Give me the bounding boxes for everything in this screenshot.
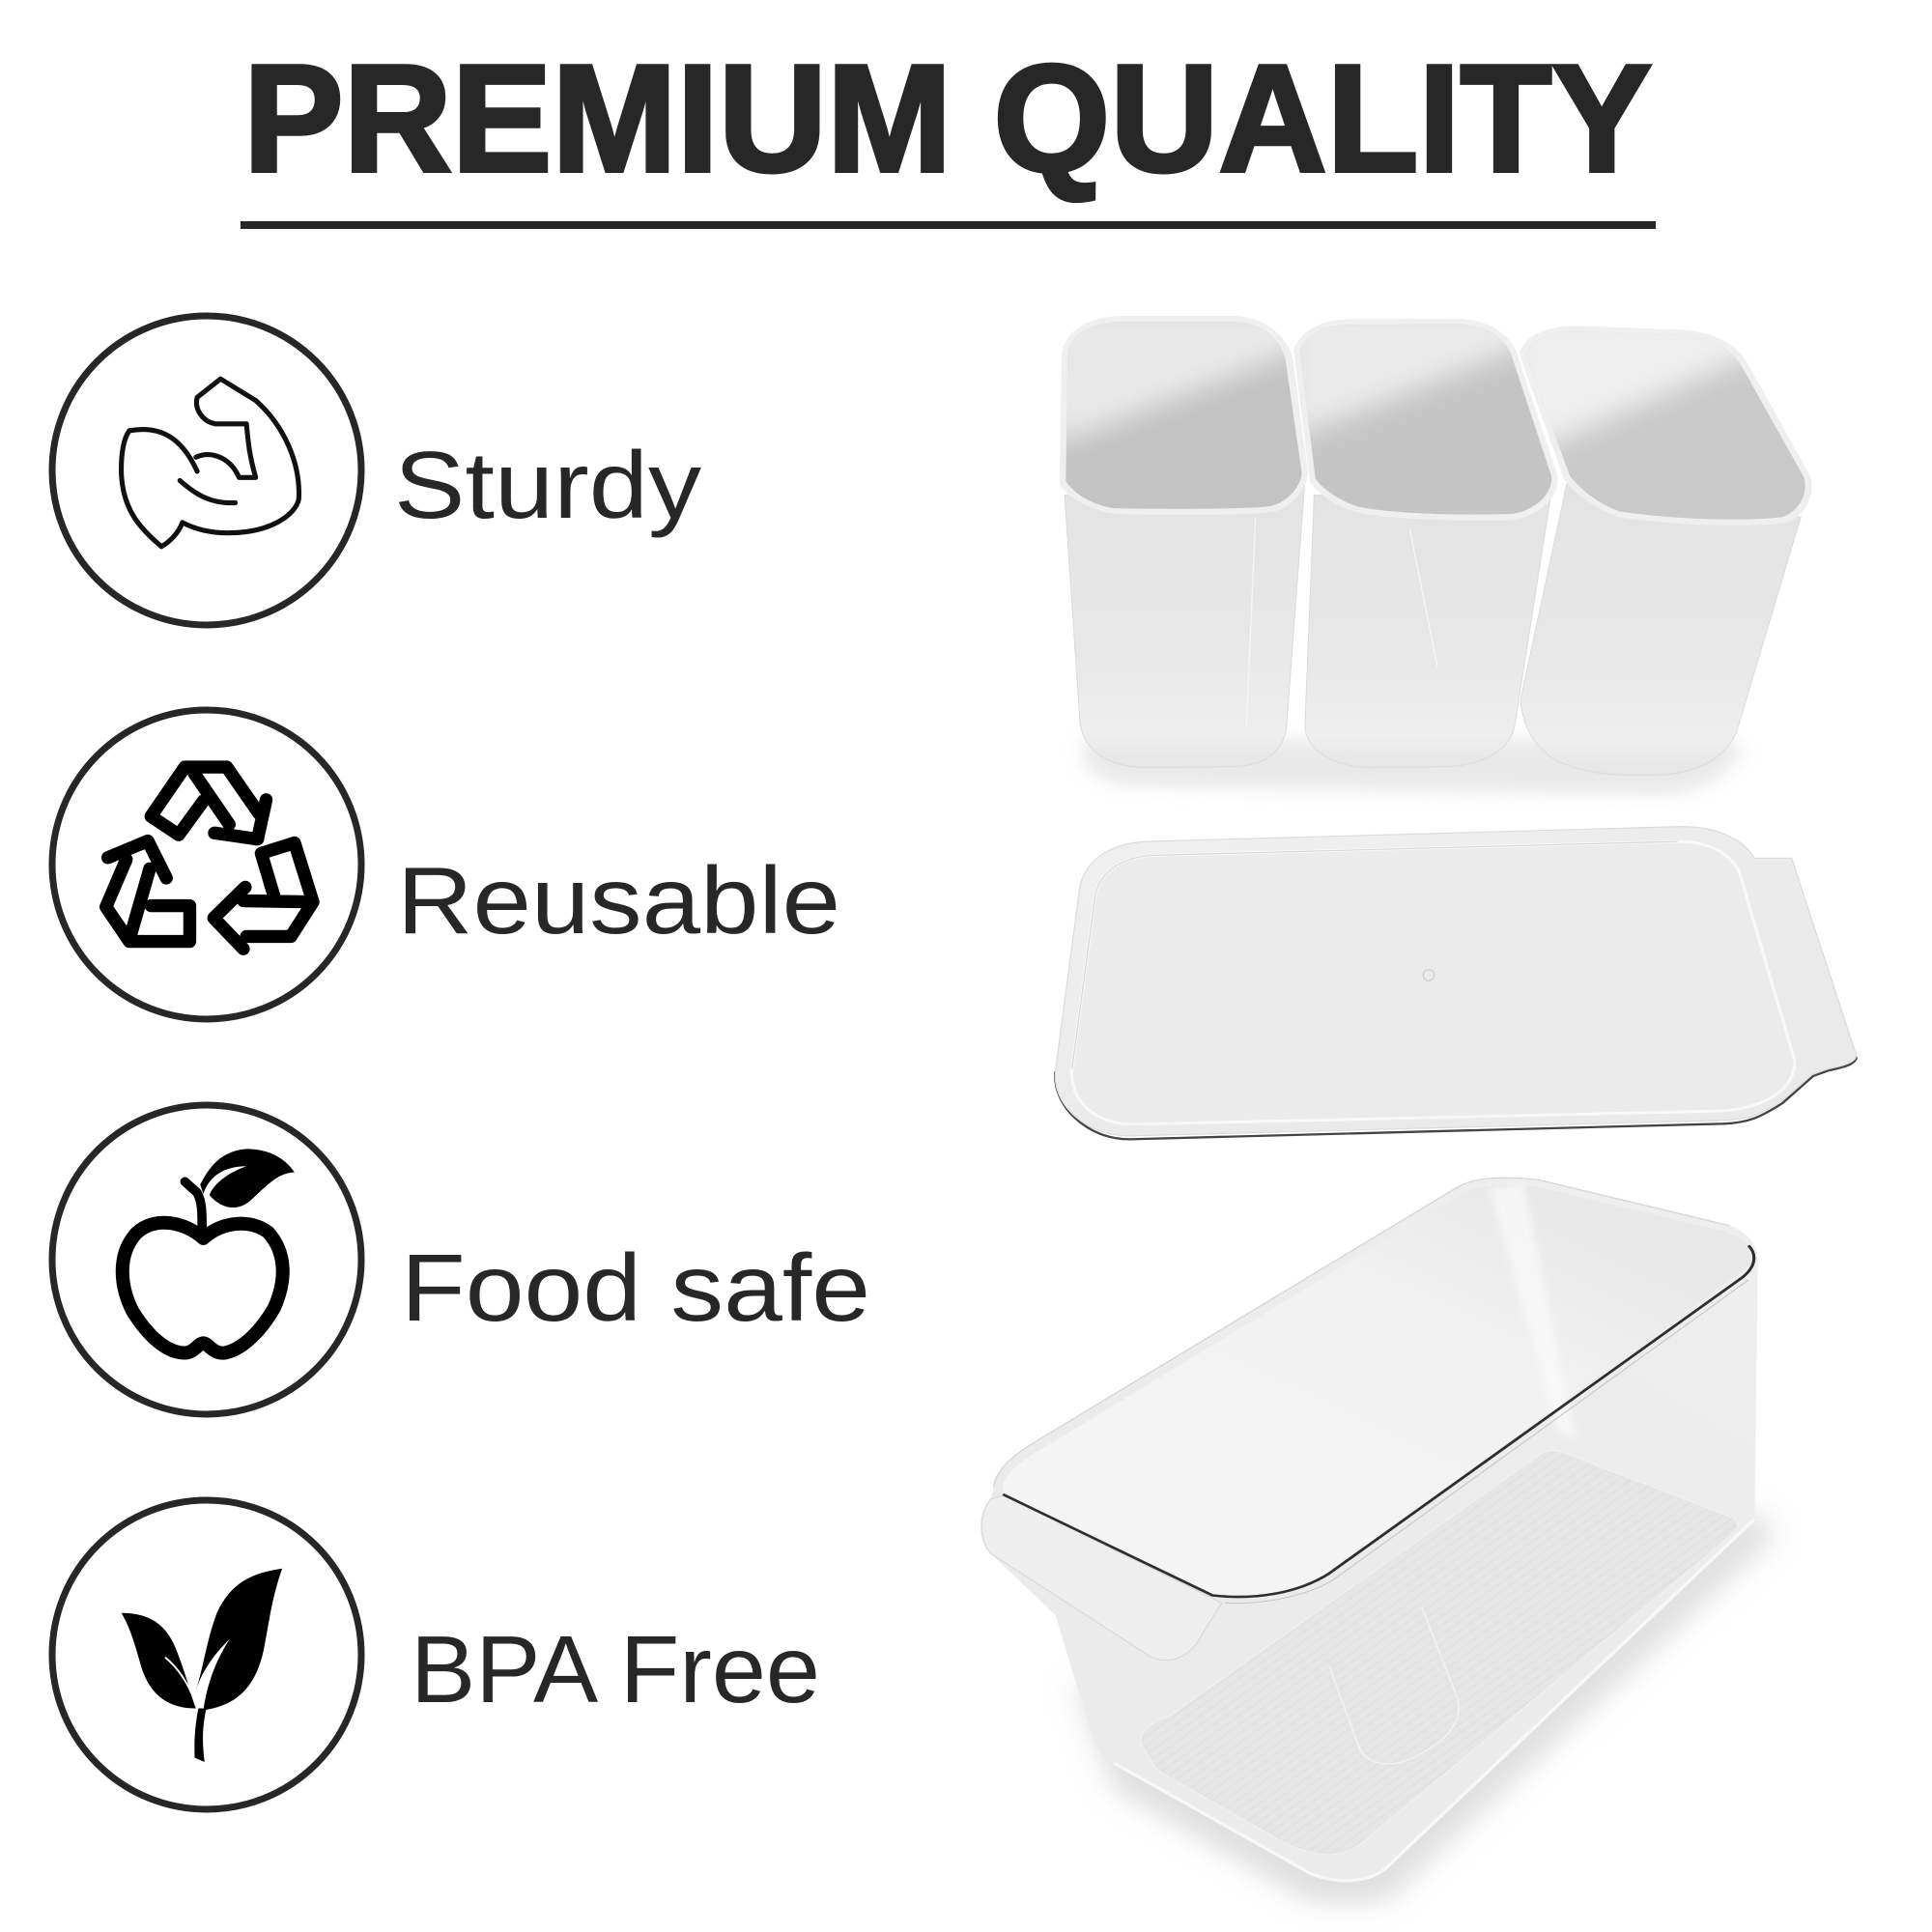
feature: Food safe xyxy=(52,1105,870,1414)
label: BPA Free: BPA Free xyxy=(411,1616,820,1722)
bin 3 xyxy=(1508,312,1811,776)
icon: recycle arrows xyxy=(106,767,313,949)
product: clear lid xyxy=(1055,827,1857,1139)
box floor xyxy=(1140,1451,1738,1855)
handle xyxy=(981,1495,1222,1661)
box interior xyxy=(1003,1185,1751,1597)
title: PREMIUM QUALITY xyxy=(243,34,1652,204)
product: clear storage box xyxy=(981,1178,1774,1903)
outer rim highlight xyxy=(994,1178,1730,1487)
bin 1 xyxy=(1046,306,1311,768)
label: Food safe: Food safe xyxy=(401,1235,870,1341)
icon: flexed arm xyxy=(122,379,298,547)
outer lower edge highlight xyxy=(1114,1519,1754,1881)
icon: apple xyxy=(123,1149,295,1353)
label: Reusable: Reusable xyxy=(397,847,840,953)
label: Sturdy: Sturdy xyxy=(394,432,701,538)
rim dark line xyxy=(1003,1245,1754,1597)
feature: Reusable xyxy=(52,710,840,1019)
product: three white inner bins xyxy=(1046,306,1811,795)
icon circle: BPA Free xyxy=(52,1500,361,1809)
icon circle: Sturdy xyxy=(52,316,361,625)
feature: BPA Free xyxy=(52,1500,820,1809)
finger scoop xyxy=(1329,1607,1459,1764)
box body xyxy=(981,1178,1758,1881)
title underline xyxy=(241,221,1656,229)
icon circle: Reusable xyxy=(52,710,361,1019)
box shadow xyxy=(1070,1504,1774,1903)
icon circle: Food safe xyxy=(52,1105,361,1414)
bin 2 xyxy=(1287,306,1558,768)
feature: Sturdy xyxy=(52,316,701,625)
icon: plant leaves xyxy=(122,1569,282,1762)
bins soft shadow xyxy=(1083,739,1743,795)
interior highlight xyxy=(1490,1184,1576,1440)
